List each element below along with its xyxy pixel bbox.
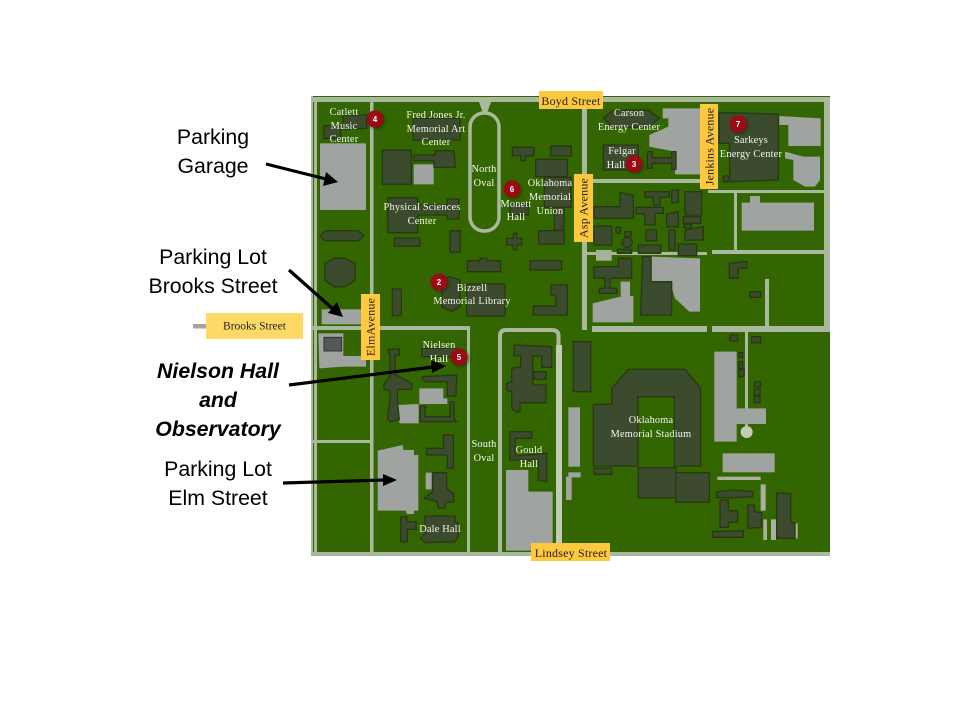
map building labels [330,107,782,535]
label: Nielson Hall and Observatory [155,359,282,441]
map building labels: Memorial Stadium [611,429,691,440]
arrow: to parking garage [266,164,338,186]
street labels: Lindsey Street [535,546,608,560]
map building labels: Energy Center [598,122,660,133]
south-west quadrant parking and buildings [318,333,553,551]
Brooks Street label [193,313,303,339]
label: Nielson Hall and Observatory: Observatory [155,417,282,441]
map building labels: Bizzell [457,283,487,294]
map building labels: Hall [520,459,538,470]
map building labels: Hall [430,354,448,365]
map building labels: Center [330,134,359,145]
label: Nielson Hall and Observatory: Nielson Hall [157,359,280,383]
label: Parking Lot Elm Street: Parking Lot [164,457,272,481]
numbered markers: 6 [510,185,515,194]
label: Parking Garage: Parking [177,125,249,149]
numbered markers: 5 [457,353,462,362]
north-east quadrant parking and buildings [593,108,821,322]
label: Parking Lot Brooks Street: Brooks Street [148,274,278,298]
map building labels: Carson [614,108,644,119]
map building labels: Memorial Art [407,124,465,135]
label: Nielson Hall and Observatory: and [199,388,238,412]
street labels: Jenkins Avenue [702,108,716,185]
Brooks Street label: Brooks Street [223,320,287,332]
label: Parking Lot Elm Street: Elm Street [168,486,268,510]
map building labels: Center [422,137,451,148]
map building labels: Fred Jones Jr. [406,110,466,121]
south-east quadrant parking and buildings [566,335,798,540]
map building labels: Dale Hall [419,524,461,535]
label: Parking Lot Elm Street [164,457,272,510]
map building labels: Energy Center [720,149,782,160]
street labels: Boyd Street [541,94,601,108]
roads [311,96,830,556]
campus map [311,91,830,561]
street labels [361,91,718,561]
street labels: Asp Avenue [576,178,590,238]
north-west quadrant parking and buildings [320,115,571,324]
label: Parking Garage [177,125,249,178]
map building labels: Hall [507,212,525,223]
arrow: to Nielsen Hall [289,360,446,385]
numbered markers: 4 [373,115,378,124]
map building labels: Memorial [529,192,571,203]
map background [311,96,830,556]
map building labels: Music [331,121,358,132]
map building labels: Oklahoma [629,415,673,426]
map building labels: North [471,164,497,175]
arrow: to Elm Street lot [283,474,397,486]
map building labels: South [471,439,497,450]
numbered markers: 3 [632,160,637,169]
label: Parking Garage: Garage [177,154,249,178]
map building labels: Oklahoma [528,178,572,189]
map building labels: Oval [474,453,494,464]
map building labels: Oval [474,178,494,189]
label: Parking Lot Brooks Street [148,245,278,298]
map building labels: Monett [501,199,531,210]
arrow: to Brooks Street lot [289,270,343,317]
street labels: ElmAvenue [364,298,378,356]
map building labels: Center [408,216,437,227]
map building labels: Memorial Library [433,296,511,307]
map building labels: Hall [607,160,625,171]
map building labels: Union [537,206,563,217]
map building labels: Physical Sciences [384,202,460,213]
numbered markers: 7 [736,120,741,129]
map building labels: Nielsen [423,340,455,351]
numbered markers [366,110,748,367]
map building labels: Gould [516,445,543,456]
map building labels: Sarkeys [734,135,768,146]
numbered markers: 2 [437,278,442,287]
label: Parking Lot Brooks Street: Parking Lot [159,245,267,269]
map building labels: Felgar [608,146,636,157]
map building labels: Catlett [330,107,358,118]
